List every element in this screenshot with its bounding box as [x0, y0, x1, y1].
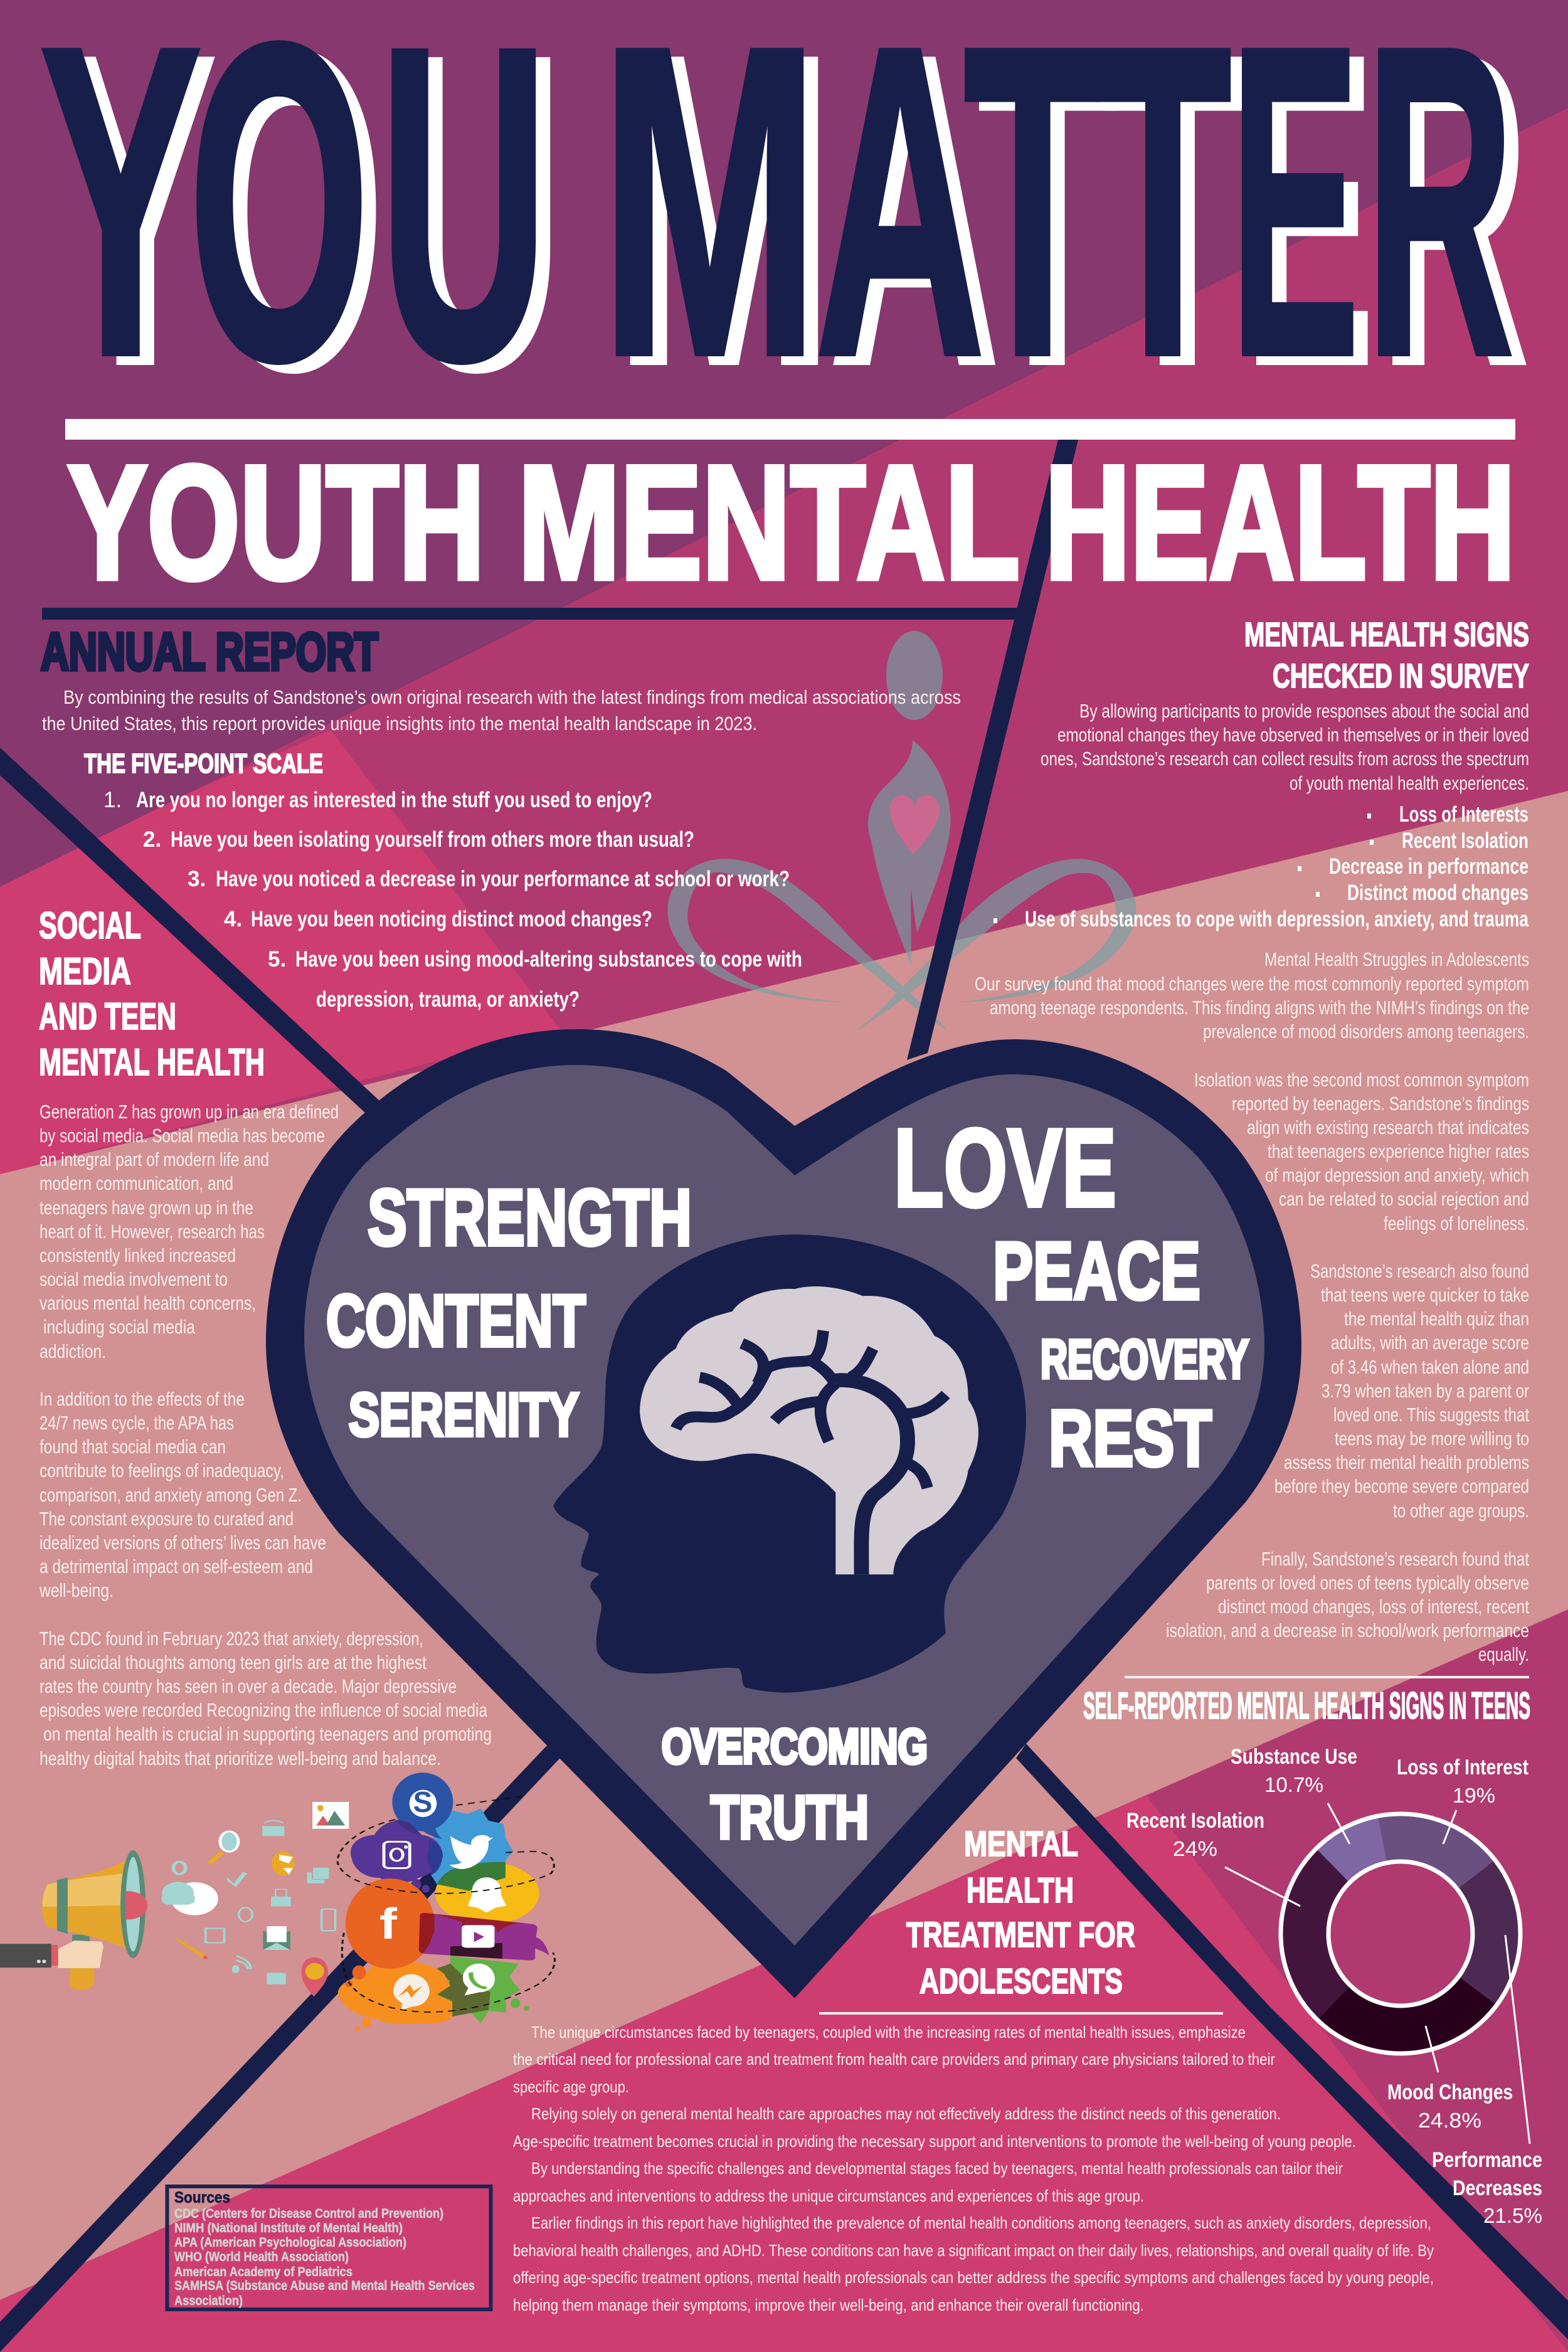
dashed orbit paths: [337, 1796, 554, 2012]
list: five questions: Have you been noticing distinct mood changes?: [251, 907, 652, 931]
rule under treatment heading: [819, 2012, 1223, 2015]
list: five questions: 5.: [268, 947, 286, 972]
background: dusty pink band: [0, 791, 1568, 2300]
sources title: Sources: [174, 2189, 230, 2206]
icon: head silhouette with brain: [553, 1234, 1026, 1693]
section: annual report: [41, 622, 961, 1012]
label: substance use: [1231, 1745, 1357, 1796]
text block: news cycle: a detrimental impact on self-esteem and: [40, 1555, 313, 1577]
sources list: [174, 2206, 475, 2308]
text block: quiz scores: to other age groups.: [1393, 1500, 1529, 1522]
icon: twitter bubble: [432, 1808, 513, 1891]
text block: generation z: social media involvement to: [40, 1268, 228, 1290]
text block: treatment body: By understanding the specific challenges and developmental stages faced by teenagers, mental health professionals can tailor their: [531, 2159, 1343, 2178]
subtitle: YOUTH MENTAL HEALTH: YOUTH: [68, 432, 485, 613]
text block: CDC findings: The CDC found in February 2023 that anxiety, depression,: [40, 1628, 423, 1650]
text block: treatment body: offering age-specific treatment options, mental health professionals can better address the specific symptoms and challenges faced by young people,: [513, 2268, 1434, 2287]
text block: news cycle: well-being.: [39, 1579, 114, 1601]
section: sources box: [167, 2186, 490, 2309]
text block: CDC findings: [40, 1628, 492, 1769]
donut chart: [1279, 1814, 1520, 2053]
icon: small floating media icons: [162, 1802, 349, 1996]
list: five questions: Have you noticed a decrease in your performance at school or work?: [216, 867, 790, 891]
text block: CDC findings: episodes were recorded Recognizing the influence of social media: [40, 1699, 488, 1721]
title: YOU MATTER: [40, 0, 1528, 463]
text block: generation z: by social media. Social media has become: [40, 1125, 325, 1147]
subtitle: YOUTH MENTAL HEALTH: MENTAL: [518, 432, 1020, 613]
heading: annual report: ANNUAL REPORT: [41, 622, 378, 681]
text block: generation z: including social media: [43, 1316, 196, 1338]
icon: whatsapp bubble: [435, 1956, 529, 2023]
sources list: Association): [174, 2294, 243, 2308]
heart words right: [894, 1106, 1249, 1483]
sources list: CDC (Centers for Disease Control and Prevention): [174, 2206, 443, 2221]
heading: five-point scale: THE FIVE-POINT SCALE: [84, 748, 323, 779]
label: performance decreases: 21.5%: [1483, 2204, 1542, 2227]
label: substance use: 10.7%: [1264, 1773, 1323, 1796]
list: five questions: Are you no longer as interested in the stuff you used to enjoy?: [136, 788, 652, 812]
list: five questions: 1.: [103, 788, 122, 812]
label: substance use: Substance Use: [1231, 1745, 1357, 1769]
sources list: WHO (World Health Association): [174, 2250, 349, 2264]
heart words right: RECOVERY: [1041, 1329, 1249, 1390]
list: five questions: [103, 788, 802, 1012]
heart words bottom: TRUTH: [711, 1783, 869, 1851]
text block: generation z: heart of it. However, research has: [40, 1221, 265, 1242]
list: five questions: depression, trauma, or anxiety?: [316, 987, 580, 1012]
text block: treatment body: Earlier findings in this report have highlighted the prevalence of mental health conditions among teenagers, such as anxiety disorders, depression,: [531, 2213, 1431, 2232]
text block: generation z: various mental health concerns,: [40, 1292, 256, 1314]
icon: megaphone with hand: [0, 1850, 147, 1990]
background: hot pink wedge upper left: [0, 730, 560, 1174]
text block: CDC findings: rates the country has seen in over a decade. Major depressive: [40, 1675, 457, 1697]
list: five questions: 2.: [143, 827, 161, 852]
label: loss of interest: 19%: [1453, 1784, 1495, 1807]
list: five questions: 3.: [188, 867, 206, 891]
subtitle: YOUTH MENTAL HEALTH: [68, 432, 1515, 613]
text block: isolation: feelings of loneliness.: [1384, 1212, 1529, 1234]
text block: generation z: Generation Z has grown up in an era defined: [40, 1101, 339, 1123]
heart words left: [326, 1173, 692, 1449]
text block: news cycle: 24/7 news cycle, the APA has: [40, 1412, 234, 1434]
sources list: American Academy of Pediatrics: [174, 2265, 352, 2279]
text block: intro: By combining the results of Sandstone’s own original research with the latest findings from medical associations across: [63, 686, 961, 708]
heart words left: SERENITY: [349, 1380, 579, 1449]
heading: treatment: ADOLESCENTS: [919, 1961, 1123, 2001]
chart leader lines: [1225, 1803, 1530, 2144]
text block: news cycle: [39, 1388, 326, 1601]
text block: intro: the United States, this report provides unique insights into the mental health landscape in 2023.: [42, 712, 757, 734]
text block: treatment body: [513, 2023, 1434, 2314]
text block: treatment body: behavioral health challenges, and ADHD. These conditions can have a significant impact on their daily lives, relationships, and overall quality of life. By: [513, 2241, 1434, 2260]
sources list: SAMHSA (Substance Abuse and Mental Health Services: [174, 2279, 475, 2293]
icon letter: skype S: S: [413, 1786, 432, 1818]
text block: news cycle: The constant exposure to curated and: [40, 1508, 294, 1530]
text block: parents observations: equally.: [1478, 1643, 1529, 1665]
text block: CDC findings: on mental health is crucial in supporting teenagers and promoting: [43, 1723, 492, 1745]
heart words right: REST: [1049, 1394, 1212, 1483]
sources list: NIMH (National Institute of Mental Health): [174, 2221, 403, 2235]
heart with head and brain: [266, 1029, 1301, 1998]
heading: treatment: TREATMENT FOR: [906, 1915, 1135, 1955]
background: hot pink lower wedge: [0, 1796, 1568, 2352]
heading: signs checked in survey: [1244, 616, 1529, 695]
divider: navy line from bar to heart: [907, 440, 1078, 1060]
label: recent isolation: Recent Isolation: [1126, 1809, 1264, 1833]
text block: survey intro: [1041, 700, 1529, 794]
heading: social media: MEDIA: [39, 950, 131, 992]
label: performance decreases: Performance: [1432, 2148, 1542, 2172]
heart words bottom: OVERCOMING: [662, 1719, 928, 1774]
text block: intro: [42, 686, 961, 734]
icon letter: facebook f: f: [379, 1899, 398, 1948]
text block: CDC findings: healthy digital habits that prioritize well-being and balance.: [40, 1747, 441, 1769]
text block: generation z: teenagers have grown up in the: [40, 1197, 253, 1219]
text block: generation z: addiction.: [40, 1340, 106, 1362]
text block: news cycle: In addition to the effects of the: [40, 1388, 245, 1410]
heart inner slate: [304, 1065, 1264, 1946]
divider: rule under headline: [42, 608, 1020, 620]
text block: treatment body: specific age group.: [513, 2077, 629, 2096]
list: signs bullets: [993, 802, 1528, 931]
title shadow: white offset letters: [54, 0, 1528, 463]
section: donut chart: [1083, 1685, 1542, 2227]
text block: generation z: consistently linked increased: [40, 1244, 236, 1266]
list: signs bullets: Recent Isolation: [1402, 829, 1528, 853]
heading: social media: MENTAL HEALTH: [39, 1041, 265, 1083]
icon: facebook bubble: [346, 1878, 435, 1969]
text block: generation z: [40, 1101, 339, 1362]
icon: instagram bubble: [351, 1820, 443, 1893]
label: performance decreases: [1432, 2148, 1542, 2227]
heart words right: PEACE: [993, 1225, 1200, 1316]
text block: treatment body: Age-specific treatment becomes crucial in providing the necessary support and interventions to promote the well-being of young people.: [513, 2132, 1356, 2151]
heart words left: CONTENT: [326, 1279, 586, 1362]
text block: treatment body: The unique circumstances faced by teenagers, coupled with the increasing rates of mental health issues, emphasize: [531, 2023, 1246, 2042]
icon: youtube bubble: [419, 1913, 549, 1961]
section: mental health signs: [975, 616, 1529, 1665]
divider: lower right navy diagonal: [1016, 1744, 1568, 2339]
text block: news cycle: found that social media can: [40, 1436, 226, 1458]
text block: treatment body: the critical need for professional care and treatment from health care providers and primary care physicians tailored to their: [513, 2050, 1275, 2069]
title front: navy letters: [40, 0, 1514, 454]
text block: treatment body: helping them manage their symptoms, improve their well-being, and enhance their overall functioning.: [513, 2296, 1144, 2314]
label: mood changes: [1387, 2080, 1513, 2132]
icon: skype bubble: [392, 1772, 453, 1840]
text block: struggles in adolescents: [975, 948, 1529, 1042]
divider above chart title: [1125, 1676, 1529, 1678]
heading: social media: [39, 904, 265, 1083]
heart words right: LOVE: [894, 1106, 1116, 1230]
background: purple top band: [0, 0, 1568, 887]
sources list: APA (American Psychological Association): [174, 2235, 406, 2250]
text block: news cycle: idealized versions of others’ lives can have: [40, 1532, 326, 1554]
sources frame: [167, 2186, 490, 2309]
label: recent isolation: [1126, 1809, 1264, 1860]
heading: treatment: MENTAL: [964, 1824, 1078, 1864]
illustration artwork: [0, 1772, 554, 2031]
label: loss of interest: Loss of Interest: [1397, 1756, 1528, 1779]
heading: social media: AND TEEN: [39, 995, 176, 1037]
label: performance decreases: Decreases: [1453, 2176, 1542, 2200]
divider: lower left navy diagonal: [0, 1745, 560, 2352]
text block: treatment body: Relying solely on general mental health care approaches may not effectively address the distinct needs of this generation.: [531, 2104, 1281, 2123]
heart outer navy: [266, 1029, 1301, 1998]
icon: ribbon figure with heart: [667, 631, 1136, 1031]
label: recent isolation: 24%: [1173, 1837, 1217, 1860]
list: five questions: Have you been using mood-altering substances to cope with: [295, 947, 802, 972]
heading: treatment: HEALTH: [967, 1870, 1074, 1910]
text block: news cycle: comparison, and anxiety among Gen Z.: [40, 1484, 302, 1506]
label: mood changes: 24.8%: [1418, 2109, 1481, 2132]
icon: snapchat bubble: [435, 1862, 539, 1924]
text block: parents observations: [1166, 1548, 1529, 1665]
label: mood changes: Mood Changes: [1387, 2080, 1513, 2104]
text block: isolation: [1194, 1069, 1529, 1234]
list: five questions: 4.: [224, 907, 242, 931]
icon: messenger bubble: [338, 1962, 452, 2031]
text block: treatment body: approaches and interventions to address the unique circumstances and experiences of this age group.: [513, 2186, 1144, 2205]
heart words left: STRENGTH: [368, 1173, 692, 1262]
text block: generation z: modern communication, and: [40, 1172, 233, 1194]
text block: CDC findings: and suicidal thoughts among teen girls are at the highest: [40, 1651, 426, 1673]
section: social media and teen mental health: [39, 904, 492, 1769]
heading: treatment: [906, 1824, 1135, 2001]
text block: news cycle: contribute to feelings of inadequacy,: [40, 1459, 284, 1481]
text block: generation z: an integral part of modern life and: [40, 1148, 269, 1170]
divider: left navy diagonal: [0, 748, 379, 1113]
section: treatment for adolescents: [513, 1824, 1434, 2314]
heading: social media: SOCIAL: [39, 904, 141, 946]
icon: snapchat ghost: [468, 1877, 506, 1912]
heart words bottom: [662, 1719, 928, 1851]
illustration: megaphone and social media icons: [0, 1772, 554, 2031]
text block: quiz scores: [1274, 1260, 1529, 1522]
label: loss of interest: [1397, 1756, 1528, 1807]
white bar under title: [65, 419, 1515, 440]
list: five questions: Have you been isolating yourself from others more than usual?: [171, 827, 694, 852]
